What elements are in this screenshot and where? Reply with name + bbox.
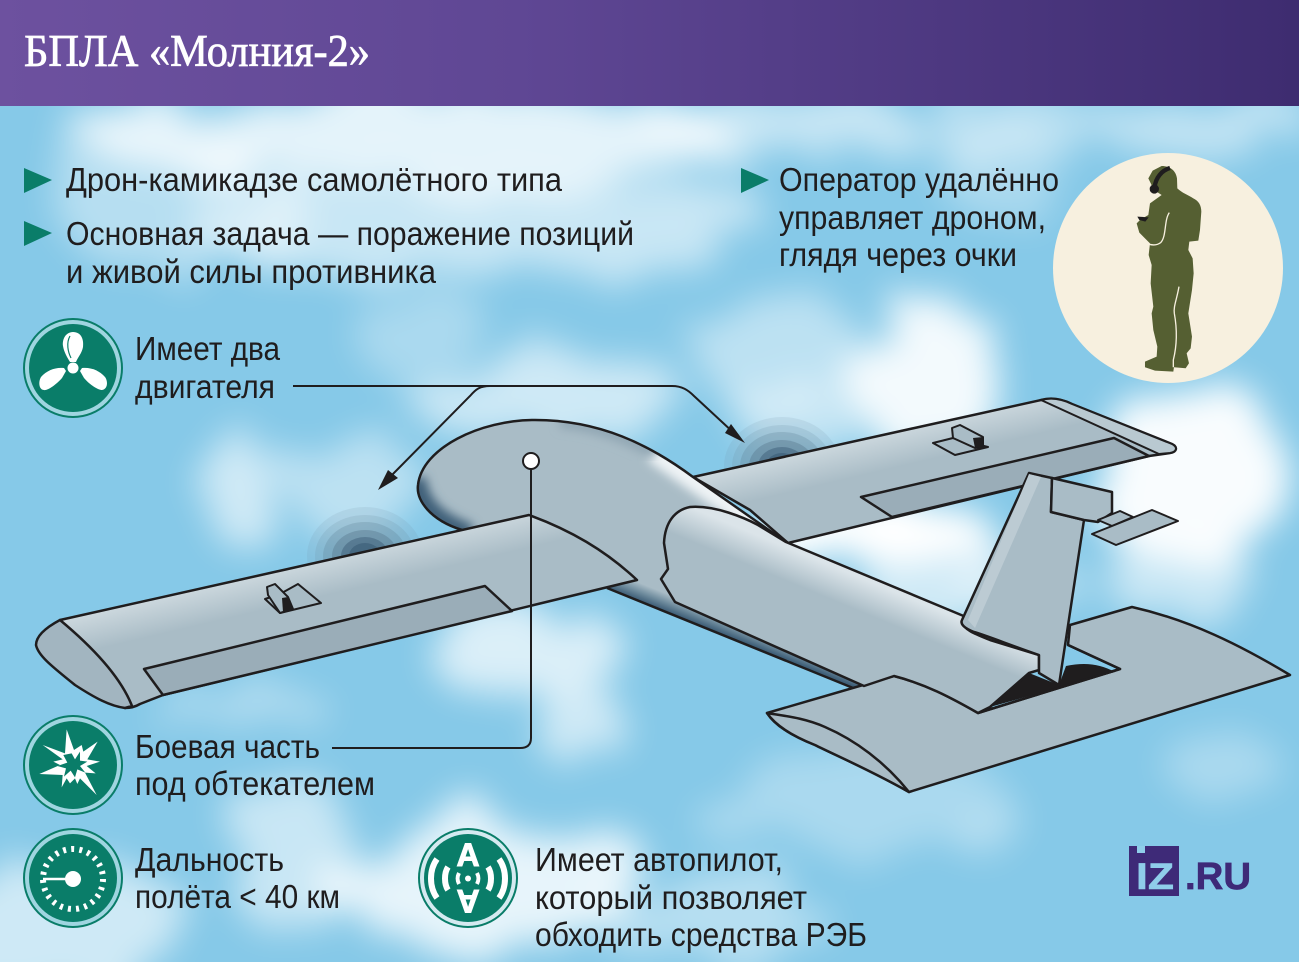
feature text	[135, 330, 281, 405]
headset	[1155, 168, 1170, 187]
feature text: который позволяет	[535, 879, 807, 916]
callout: engines leader lines	[293, 386, 745, 490]
title: БПЛА «Молния-2»	[24, 26, 370, 76]
cutout edge	[978, 645, 1120, 713]
callout: warhead leader line	[332, 453, 539, 748]
icon: explosion	[24, 716, 122, 814]
feature text: Имеет автопилот,	[535, 841, 783, 878]
bullet marker	[24, 221, 52, 246]
operator text: Оператор удалённо	[779, 161, 1059, 198]
fin leading-edge highlight	[968, 474, 1041, 628]
feature: two engines	[24, 319, 281, 417]
logo: iz.ru: .RU	[1185, 856, 1251, 898]
right wing	[693, 399, 1176, 543]
logo: iz.ru: IZ	[1136, 856, 1174, 897]
rear fuselage	[661, 507, 1039, 713]
icon: autopilot: А	[456, 837, 480, 873]
icon: autopilot	[419, 829, 517, 927]
operator text: глядя через очки	[779, 236, 1017, 273]
operator text: управляет дроном,	[779, 199, 1046, 236]
tail cutout	[990, 664, 1115, 707]
feature text: под обтекателем	[135, 765, 375, 802]
right wing tip strip	[1041, 399, 1176, 454]
feature text: двигателя	[135, 368, 275, 405]
bullet list: drone description	[24, 161, 634, 290]
arrow head right	[725, 424, 745, 443]
propeller discs	[307, 417, 840, 605]
bullet text: main task: Основная задача — поражение позиций	[66, 215, 634, 252]
feature: autopilot	[419, 829, 867, 953]
feature text	[135, 841, 340, 915]
operator badge	[1053, 153, 1283, 383]
left wing tip	[36, 620, 132, 708]
feature: flight range	[24, 829, 340, 927]
bullet text: type: Дрон-камикадзе самолётного типа	[66, 161, 563, 198]
feature text: Дальность	[135, 841, 284, 878]
icon: gauge	[24, 829, 122, 927]
operator text	[779, 161, 1059, 273]
drone illustration	[36, 399, 1290, 792]
header bar	[0, 0, 1299, 106]
arrow head left	[378, 470, 398, 490]
bullet marker	[741, 168, 769, 193]
feature: warhead	[24, 716, 375, 814]
small connector	[1098, 511, 1133, 526]
feature text: обходить средства РЭБ	[535, 916, 867, 953]
bullet text: main task	[66, 215, 634, 290]
rudder	[1051, 478, 1112, 522]
stabilizer airfoil end	[767, 713, 909, 792]
feature text: Боевая часть	[135, 728, 320, 765]
right flap	[861, 438, 1149, 517]
left wing	[36, 515, 637, 708]
fuselage underside	[607, 579, 864, 690]
icon: propeller	[24, 319, 122, 417]
arm highlight	[1149, 213, 1169, 245]
logo: iz.ru	[1129, 846, 1251, 898]
left wing servo	[265, 584, 321, 613]
feature text: полёта < 40 км	[135, 878, 340, 915]
icon: autopilot: А	[456, 883, 480, 919]
feature text	[135, 728, 375, 802]
leg highlight	[1173, 287, 1179, 367]
fuselage nose and neck	[416, 418, 778, 580]
controller	[1137, 217, 1149, 222]
icon: operator silhouette	[1137, 166, 1201, 372]
small elevator	[1092, 510, 1178, 545]
warhead marker	[523, 453, 539, 469]
bullet: operator	[741, 161, 1059, 273]
bullet marker	[24, 168, 52, 193]
feature text: Имеет два	[135, 330, 281, 367]
feature text	[535, 841, 867, 953]
right wing servo	[933, 425, 988, 455]
horizontal stabilizer and cutout	[767, 607, 1290, 792]
vertical fin	[962, 473, 1178, 685]
left flap	[144, 586, 512, 695]
bullet text: main task: и живой силы противника	[66, 253, 437, 290]
nose shading	[419, 422, 756, 529]
nose outline	[418, 420, 786, 542]
